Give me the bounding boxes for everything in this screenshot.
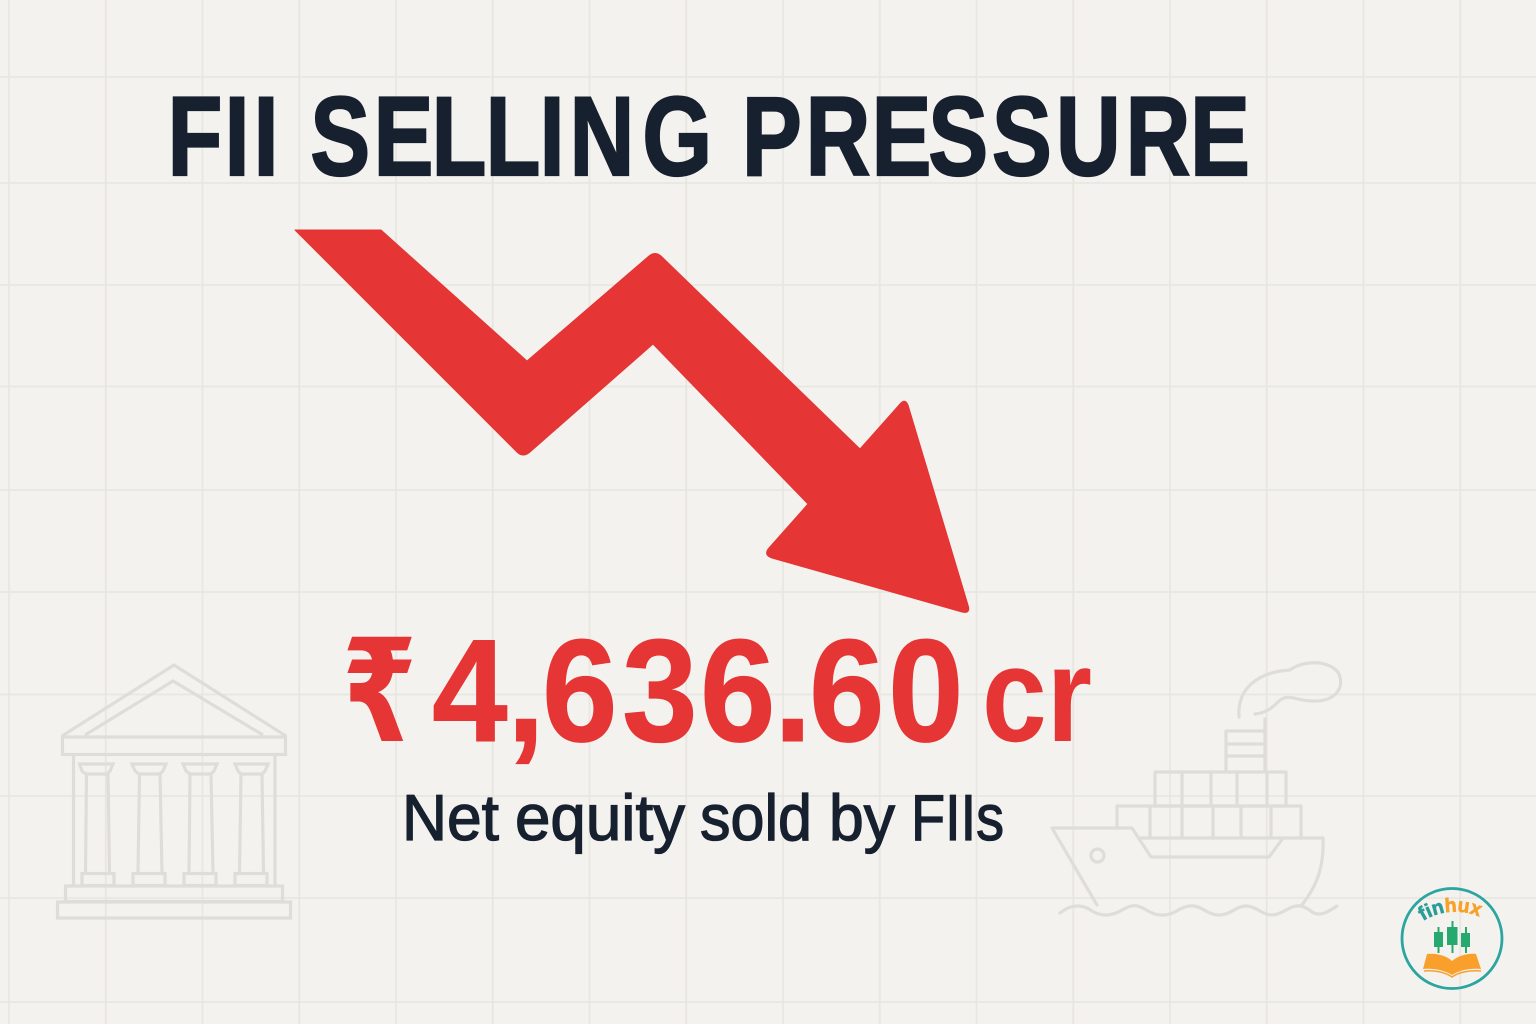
title: FII xyxy=(168,75,279,199)
subtitle: equity xyxy=(515,781,685,854)
arrow: falling red zigzag xyxy=(295,230,969,612)
amount figure: 4,636.60 xyxy=(432,608,964,772)
subtitle xyxy=(402,781,1004,854)
rupee symbol: ₹ xyxy=(342,608,417,775)
title xyxy=(168,75,1250,199)
title: SELLING xyxy=(310,75,712,199)
subtitle: by xyxy=(829,781,895,854)
amount unit: cr xyxy=(982,619,1092,770)
subtitle: sold xyxy=(700,781,812,854)
icon: container ship xyxy=(1052,663,1341,915)
icon: bank building xyxy=(58,665,290,918)
logo: finhux xyxy=(1400,887,1504,990)
title: PRESSURE xyxy=(742,75,1250,199)
subtitle: Net xyxy=(402,781,499,854)
subtitle: FIIs xyxy=(911,781,1004,854)
logo: finhux: finhux xyxy=(1418,898,1483,920)
